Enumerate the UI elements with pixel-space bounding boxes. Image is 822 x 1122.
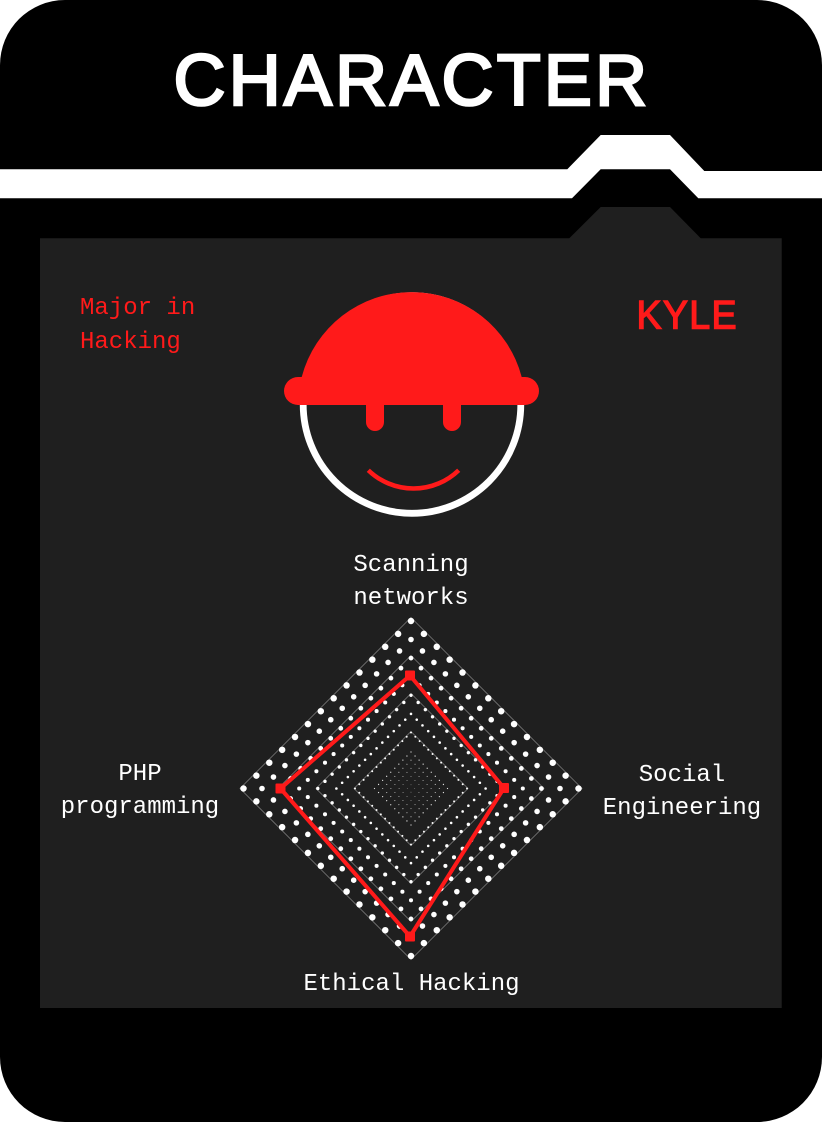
text: major xyxy=(80,295,195,356)
label: scanning networks: Scanning xyxy=(353,552,469,579)
panel: character sheet xyxy=(40,207,782,1008)
text: major: Major in xyxy=(80,295,195,322)
radar grid rings xyxy=(240,618,582,960)
label: php programming xyxy=(61,761,219,821)
label: php programming: PHP xyxy=(118,761,162,788)
label: social engineering: Social xyxy=(639,762,725,789)
left eye xyxy=(366,395,384,431)
smile xyxy=(368,470,459,488)
label: social engineering xyxy=(603,762,761,822)
data markers xyxy=(276,670,509,942)
head outline xyxy=(303,296,521,513)
hat dome xyxy=(302,292,522,405)
data polygon xyxy=(280,676,504,936)
halftone dot field xyxy=(244,621,578,956)
title: CHARACTER xyxy=(174,41,650,121)
label: scanning networks xyxy=(353,552,469,612)
icon: smiling character with red hat xyxy=(284,292,539,513)
right eye xyxy=(443,395,461,431)
label: php programming: programming xyxy=(61,794,219,821)
white header band with tab xyxy=(0,135,822,198)
character name: KYLE xyxy=(636,293,738,338)
text: major: Hacking xyxy=(80,329,181,356)
label: ethical hacking: Ethical Hacking xyxy=(303,971,520,998)
label: scanning networks: networks xyxy=(353,585,469,612)
radar chart xyxy=(240,618,582,960)
hat brim xyxy=(284,377,539,405)
label: social engineering: Engineering xyxy=(603,795,761,822)
